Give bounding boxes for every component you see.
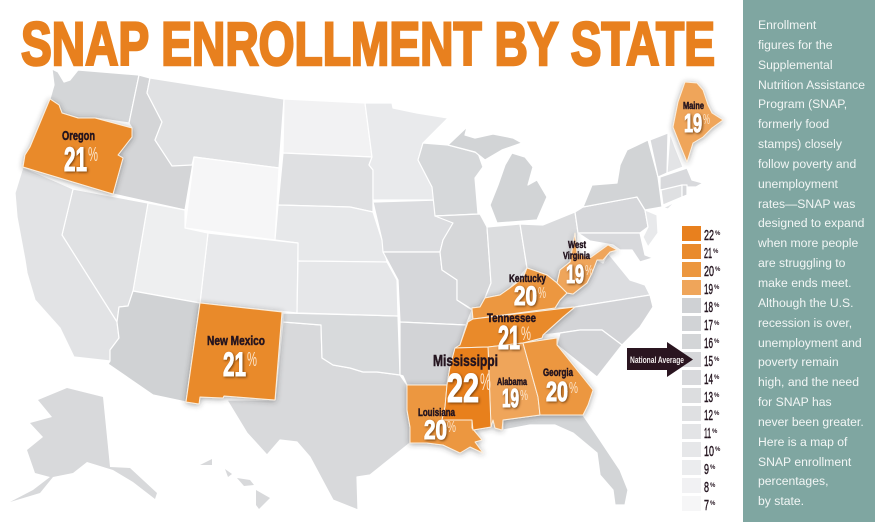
legend: % bbox=[710, 465, 716, 471]
Louisiana label: % bbox=[447, 419, 456, 436]
Georgia label bbox=[543, 367, 578, 407]
legend: 17 bbox=[704, 317, 713, 334]
sidebar text: when more people bbox=[758, 236, 858, 250]
sidebar text: are struggling to bbox=[758, 256, 845, 270]
panel: sidebar description bbox=[743, 0, 875, 522]
West Virginia label: West bbox=[568, 240, 587, 251]
Tennessee label: % bbox=[521, 324, 531, 345]
legend: % bbox=[714, 375, 720, 381]
Oregon label: % bbox=[88, 144, 98, 166]
sidebar text: Here is a map of bbox=[758, 435, 847, 449]
West Virginia label: Virginia bbox=[563, 251, 590, 262]
sidebar text: rates—SNAP was bbox=[758, 197, 855, 211]
Maine label: % bbox=[703, 111, 710, 128]
legend: % bbox=[714, 321, 720, 327]
sidebar text: follow poverty and bbox=[758, 157, 856, 171]
New Mexico label: 21 bbox=[223, 346, 246, 384]
sidebar text: Although the U.S. bbox=[758, 296, 854, 310]
legend: 18 bbox=[704, 299, 713, 316]
legend: 20 bbox=[704, 263, 714, 280]
West Virginia label: % bbox=[585, 262, 593, 279]
Tennessee label: Tennessee bbox=[487, 311, 536, 325]
legend: 11 bbox=[704, 425, 711, 442]
legend: % bbox=[715, 447, 721, 453]
legend: % bbox=[714, 285, 720, 291]
Louisiana label: 20 bbox=[424, 415, 447, 445]
Louisiana label bbox=[418, 407, 456, 445]
sidebar text: never been greater. bbox=[758, 415, 864, 429]
legend: % bbox=[714, 303, 720, 309]
sidebar text: stamps) closely bbox=[758, 137, 842, 151]
legend: 14 bbox=[704, 371, 713, 388]
highlighted states bbox=[23, 82, 723, 453]
Maine label: Maine bbox=[683, 101, 704, 112]
legend: 13 bbox=[704, 389, 713, 406]
sidebar text: Enrollment bbox=[758, 18, 816, 32]
legend: % bbox=[713, 249, 719, 255]
sidebar text: recession is over, bbox=[758, 316, 852, 330]
sidebar text: unemployment bbox=[758, 177, 838, 191]
map: base states bbox=[10, 69, 703, 510]
legend: % bbox=[710, 483, 716, 489]
Kentucky label bbox=[509, 273, 547, 311]
sidebar text: unemployment and bbox=[758, 336, 862, 350]
Alabama label: Alabama bbox=[497, 377, 527, 388]
sidebar text: poverty remain bbox=[758, 355, 839, 369]
Kentucky label: Kentucky bbox=[509, 273, 547, 285]
legend: 10 bbox=[704, 443, 714, 460]
West Virginia label: 19 bbox=[566, 259, 584, 289]
legend: % bbox=[715, 267, 721, 273]
Oregon label bbox=[62, 128, 98, 179]
Tennessee label: 21 bbox=[498, 319, 520, 356]
Alabama label: % bbox=[520, 387, 528, 404]
sidebar text: SNAP enrollment bbox=[758, 455, 851, 469]
sidebar text: figures for the bbox=[758, 38, 833, 52]
legend: 21 bbox=[704, 245, 712, 262]
Georgia label: 20 bbox=[546, 376, 568, 407]
Mississippi label: 22 bbox=[447, 365, 479, 411]
sidebar text: Supplemental bbox=[758, 58, 833, 72]
sidebar text: percentages, bbox=[758, 474, 828, 488]
Tennessee label bbox=[487, 311, 536, 356]
arrow: national average: National Average bbox=[630, 355, 684, 365]
Maine label: 19 bbox=[684, 108, 702, 138]
legend: 8 bbox=[704, 479, 709, 496]
sidebar text: Nutrition Assistance bbox=[758, 78, 865, 92]
Kentucky label: % bbox=[538, 285, 546, 302]
legend: % bbox=[715, 231, 721, 237]
Oregon label: 21 bbox=[64, 141, 87, 179]
Georgia label: Georgia bbox=[543, 367, 574, 379]
legend: % bbox=[714, 411, 720, 417]
Kentucky label: 20 bbox=[514, 281, 537, 311]
West Virginia label bbox=[563, 240, 593, 289]
Alabama label bbox=[497, 377, 528, 413]
Hawaii bbox=[200, 459, 270, 509]
Mississippi label: Mississippi bbox=[433, 353, 498, 370]
legend: 7 bbox=[704, 497, 709, 514]
New Mexico label: % bbox=[247, 349, 257, 371]
legend: % bbox=[710, 501, 716, 507]
legend: % bbox=[712, 429, 718, 435]
Louisiana label: Louisiana bbox=[418, 407, 456, 419]
sidebar text: designed to expand bbox=[758, 216, 864, 230]
legend: % bbox=[714, 393, 720, 399]
sidebar text: high, and the need bbox=[758, 375, 859, 389]
New Mexico label: New Mexico bbox=[207, 333, 265, 348]
Alaska bbox=[10, 388, 157, 502]
New Mexico label bbox=[207, 333, 265, 384]
legend: % bbox=[714, 357, 720, 363]
sidebar text bbox=[758, 18, 865, 508]
Mississippi label bbox=[433, 353, 498, 411]
arrow: national average bbox=[627, 342, 693, 377]
Georgia label: % bbox=[569, 380, 578, 397]
sidebar text: formerly food bbox=[758, 117, 829, 131]
legend: 9 bbox=[704, 461, 709, 478]
sidebar text: Program (SNAP, bbox=[758, 97, 847, 111]
sidebar text: by state. bbox=[758, 494, 804, 508]
sidebar text: make ends meet. bbox=[758, 276, 851, 290]
legend: 16 bbox=[704, 335, 713, 352]
Mississippi label: % bbox=[480, 369, 491, 396]
sidebar text: for SNAP has bbox=[758, 395, 832, 409]
legend: 19 bbox=[704, 281, 713, 298]
Alabama label: 19 bbox=[502, 383, 519, 413]
Oregon label: Oregon bbox=[62, 128, 95, 143]
legend: 15 bbox=[704, 353, 713, 370]
legend: 22 bbox=[704, 227, 714, 244]
legend: 12 bbox=[704, 407, 713, 424]
legend: % bbox=[714, 339, 720, 345]
legend bbox=[682, 226, 721, 514]
